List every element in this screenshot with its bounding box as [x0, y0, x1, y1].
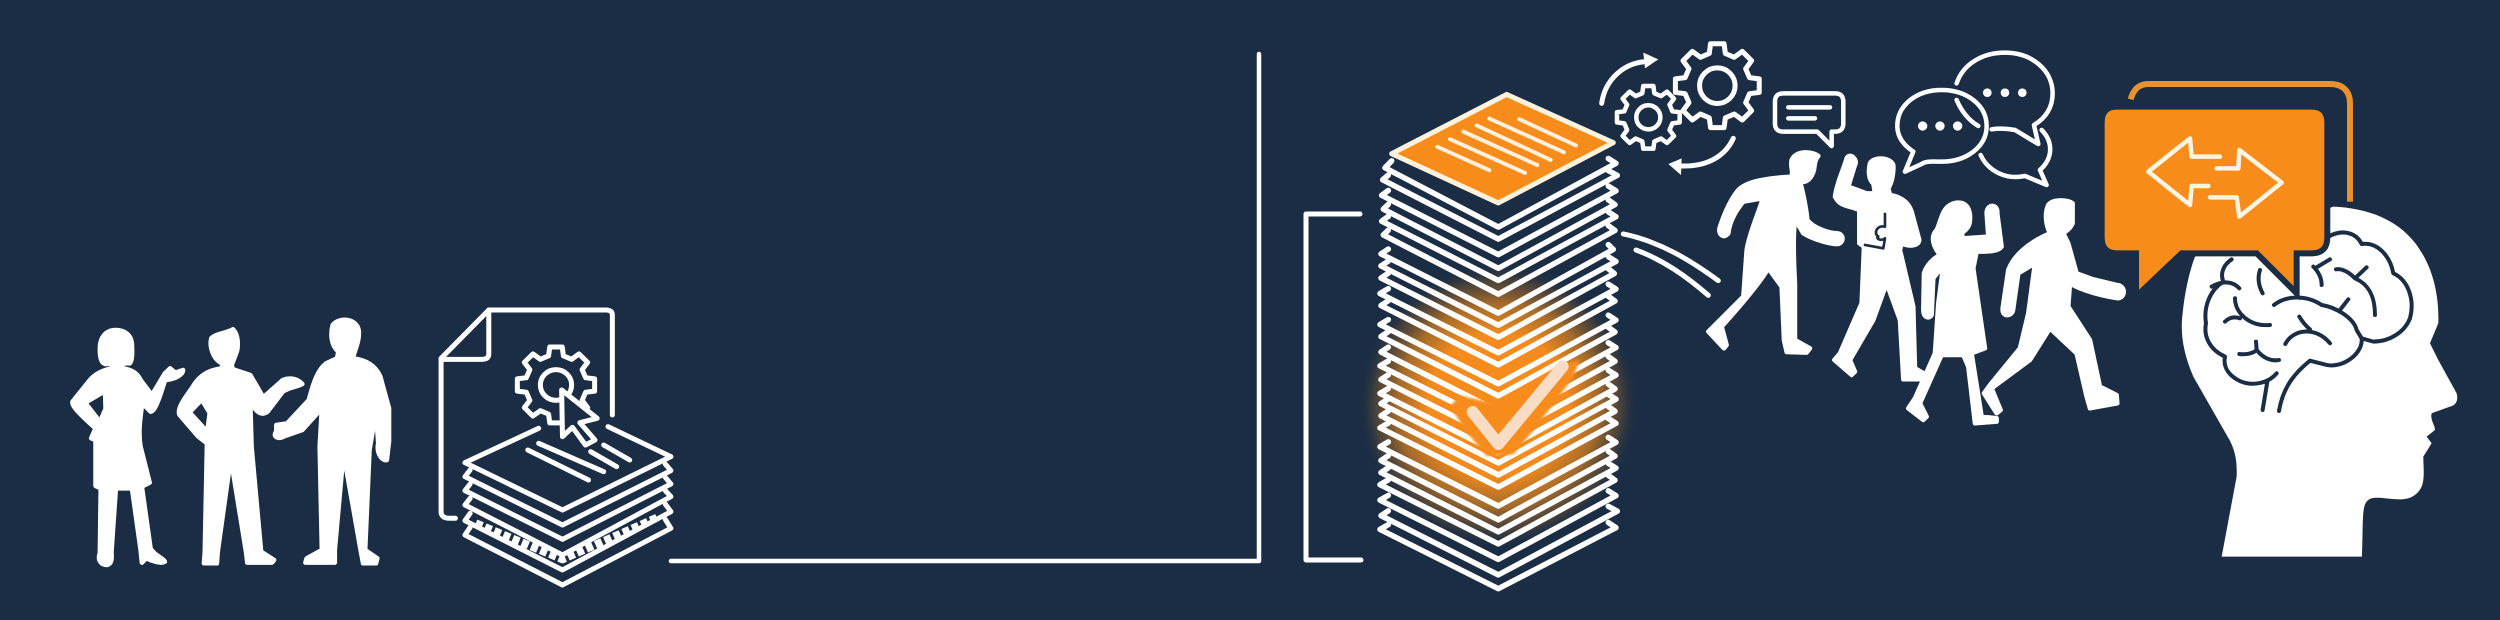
person: man gesturing: [179, 329, 302, 563]
icon: check mark: [1473, 367, 1563, 444]
head with brain and orange speech bubble: [2102, 84, 2457, 557]
person: man with raised hand and clipboard: [1834, 156, 1927, 379]
back bubble outline: [2131, 84, 2350, 202]
brain outline: [2205, 232, 2412, 411]
large stack of documents: [1380, 94, 1617, 589]
front bubble: [1897, 90, 1987, 172]
arrow: lower curved: [1668, 138, 1733, 175]
group of three standing people: [72, 320, 389, 565]
gear: [517, 347, 595, 423]
person: woman walking with raised arm: [1908, 203, 2002, 423]
stacked sheets: [1380, 158, 1617, 589]
orange speech bubble: [2102, 107, 2327, 297]
text lines on orange sheet: [1437, 119, 1576, 173]
back bubble: [1957, 53, 2053, 144]
icon: large gear: [1675, 44, 1759, 128]
connector line from first stack to second section: [671, 54, 1259, 561]
head silhouette: [2182, 207, 2457, 557]
motion lines: [1623, 234, 1718, 295]
lower sheets: [465, 464, 671, 525]
cursor arrow: [562, 390, 597, 445]
walking people: [1708, 152, 2124, 423]
top sheet of paper stack: [465, 427, 671, 510]
lower bubble: [1981, 130, 2050, 185]
icon: rectangular chat bubble: [1775, 93, 1843, 146]
icon: small gear: [1617, 86, 1680, 149]
gears, arrows and speech bubbles above walking people: [1602, 44, 2124, 423]
document fold: [441, 310, 489, 359]
arrow: upper curved: [1602, 53, 1658, 103]
person: first walking man: [1708, 152, 1843, 353]
document outline: [441, 310, 612, 518]
text lines on top sheet: [528, 443, 630, 480]
bracket beside large stack: [1306, 214, 1361, 560]
person: woman with hand on hip: [72, 330, 183, 565]
glow behind large stack: [1358, 263, 1638, 547]
dots in bubbles: [1918, 88, 2027, 131]
icon: document with gear, cursor and small paper stack: [441, 310, 671, 585]
orange core interrupting the sheet lines: [1450, 360, 1580, 456]
person: last walking man: [1984, 200, 2124, 413]
top orange sheet: [1392, 94, 1613, 203]
zigzag patterned sheet: [476, 517, 658, 559]
person: tall man with open hand: [275, 320, 389, 563]
icon: three overlapping speech bubbles: [1897, 53, 2053, 185]
icon: exchange arrows: [2148, 138, 2282, 217]
